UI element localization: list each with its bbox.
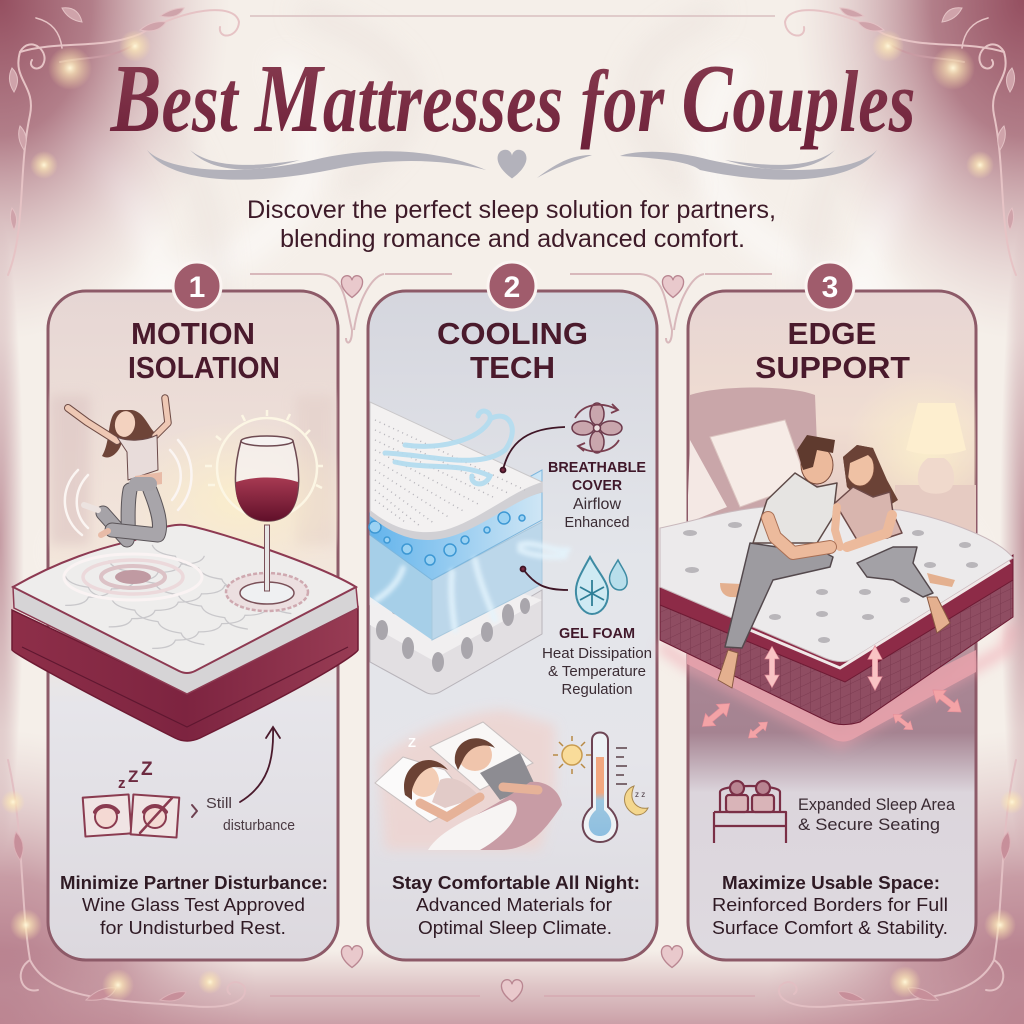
icon: moon xyxy=(624,786,648,815)
panel: cooling tech xyxy=(368,262,657,960)
heading: motion isolation: MOTION xyxy=(131,316,255,351)
mattress layers xyxy=(369,402,568,694)
panel: edge support xyxy=(660,262,1013,960)
gel foam layer xyxy=(369,470,568,640)
table lamp xyxy=(915,403,966,494)
number badge 2 xyxy=(488,262,536,310)
sleeping partners icon: Z xyxy=(128,767,138,786)
icon: bed xyxy=(714,781,786,843)
icon: cooling drop xyxy=(576,557,627,614)
subtitle: blending romance and advanced comfort. xyxy=(280,225,745,253)
caption 1: Minimize Partner Disturbance: xyxy=(60,873,328,893)
support arrows xyxy=(697,646,966,742)
sleeping partners icon: z xyxy=(118,775,126,792)
mattress 3 xyxy=(660,505,1013,742)
label: gel foam: Regulation xyxy=(562,681,632,698)
caption 2 xyxy=(392,873,640,938)
breathable cover layer xyxy=(370,402,542,540)
label: expanded sleep area: Expanded Sleep Area xyxy=(798,796,956,814)
icon: fan xyxy=(572,403,622,453)
number badge 2: 2 xyxy=(504,271,520,304)
corner flourish: top left xyxy=(8,8,239,275)
heading: cooling tech xyxy=(437,316,588,385)
caption 2: Advanced Materials for xyxy=(416,895,612,915)
label: breathable cover xyxy=(548,460,646,531)
sleeping couple: Z xyxy=(408,735,416,750)
heading: edge support: EDGE xyxy=(788,316,876,351)
label: still disturbance: Still xyxy=(206,795,232,812)
label: breathable cover: BREATHABLE xyxy=(548,460,646,476)
jumping woman xyxy=(65,398,192,540)
caption 2: Stay Comfortable All Night: xyxy=(392,873,640,893)
heading: edge support xyxy=(755,316,910,385)
wine glass xyxy=(226,436,308,611)
icon: sun xyxy=(553,736,591,774)
panel: motion isolation xyxy=(12,262,360,960)
heading: edge support: SUPPORT xyxy=(755,350,910,385)
bottom support foam layer xyxy=(370,577,542,694)
caption 3: Maximize Usable Space: xyxy=(722,873,940,893)
callout line: gel xyxy=(520,566,568,590)
mattress 1 xyxy=(12,525,358,741)
arrow: upward xyxy=(240,727,280,802)
ripple rings xyxy=(64,554,202,600)
number badge 1: 1 xyxy=(189,271,205,304)
heading: cooling tech: TECH xyxy=(470,350,555,385)
connectors and hearts between panels xyxy=(250,274,772,1002)
number badge 3 xyxy=(806,262,854,310)
caption 1 xyxy=(60,873,328,938)
number badge 1 xyxy=(173,262,221,310)
label: breathable cover: Enhanced xyxy=(564,514,630,531)
panel 1 curtains backdrop xyxy=(48,392,338,548)
corner flourish: bottom right xyxy=(779,760,1016,1007)
caption 2: Optimal Sleep Climate. xyxy=(418,918,612,938)
wine glass halo xyxy=(205,410,323,518)
label: still disturbance: disturbance xyxy=(223,817,295,834)
sleeping partners icon xyxy=(83,759,197,838)
caption 1: Wine Glass Test Approved xyxy=(82,895,305,915)
label: breathable cover: COVER xyxy=(572,478,622,494)
sleeping couple xyxy=(375,710,562,850)
caption 3 xyxy=(712,873,948,938)
icon: moon: z z xyxy=(635,790,645,799)
heading: cooling tech: COOLING xyxy=(437,316,588,351)
title divider with heart xyxy=(147,150,877,180)
label: gel foam: Heat Dissipation xyxy=(542,645,652,662)
airflow swirls xyxy=(385,411,512,484)
callout line: cover xyxy=(500,427,565,472)
label: gel foam: & Temperature xyxy=(548,663,646,680)
caption 3: Surface Comfort & Stability. xyxy=(712,918,948,938)
bedroom backdrop xyxy=(688,388,976,533)
heading: motion isolation xyxy=(128,316,280,385)
subtitle xyxy=(247,196,776,253)
subtitle: Discover the perfect sleep solution for partners, xyxy=(247,196,776,224)
title: Best Mattresses for Couples xyxy=(110,45,915,153)
label: still disturbance xyxy=(206,795,295,834)
number badge 3: 3 xyxy=(822,271,838,304)
corner flourish: bottom left xyxy=(8,760,245,1007)
corner flourish: top right xyxy=(785,8,1016,275)
couple sitting xyxy=(718,435,955,688)
heading: motion isolation: ISOLATION xyxy=(128,350,280,385)
label: expanded sleep area: & Secure Seating xyxy=(798,816,940,834)
caption 3: Reinforced Borders for Full xyxy=(712,895,948,915)
caption 1: for Undisturbed Rest. xyxy=(100,918,286,938)
label: gel foam: GEL FOAM xyxy=(559,625,635,642)
label: breathable cover: Airflow xyxy=(573,496,622,513)
label: gel foam xyxy=(542,625,652,698)
label: expanded sleep area xyxy=(798,796,956,834)
sleeping partners icon: Z xyxy=(141,759,153,780)
icon: thermometer xyxy=(583,732,627,842)
